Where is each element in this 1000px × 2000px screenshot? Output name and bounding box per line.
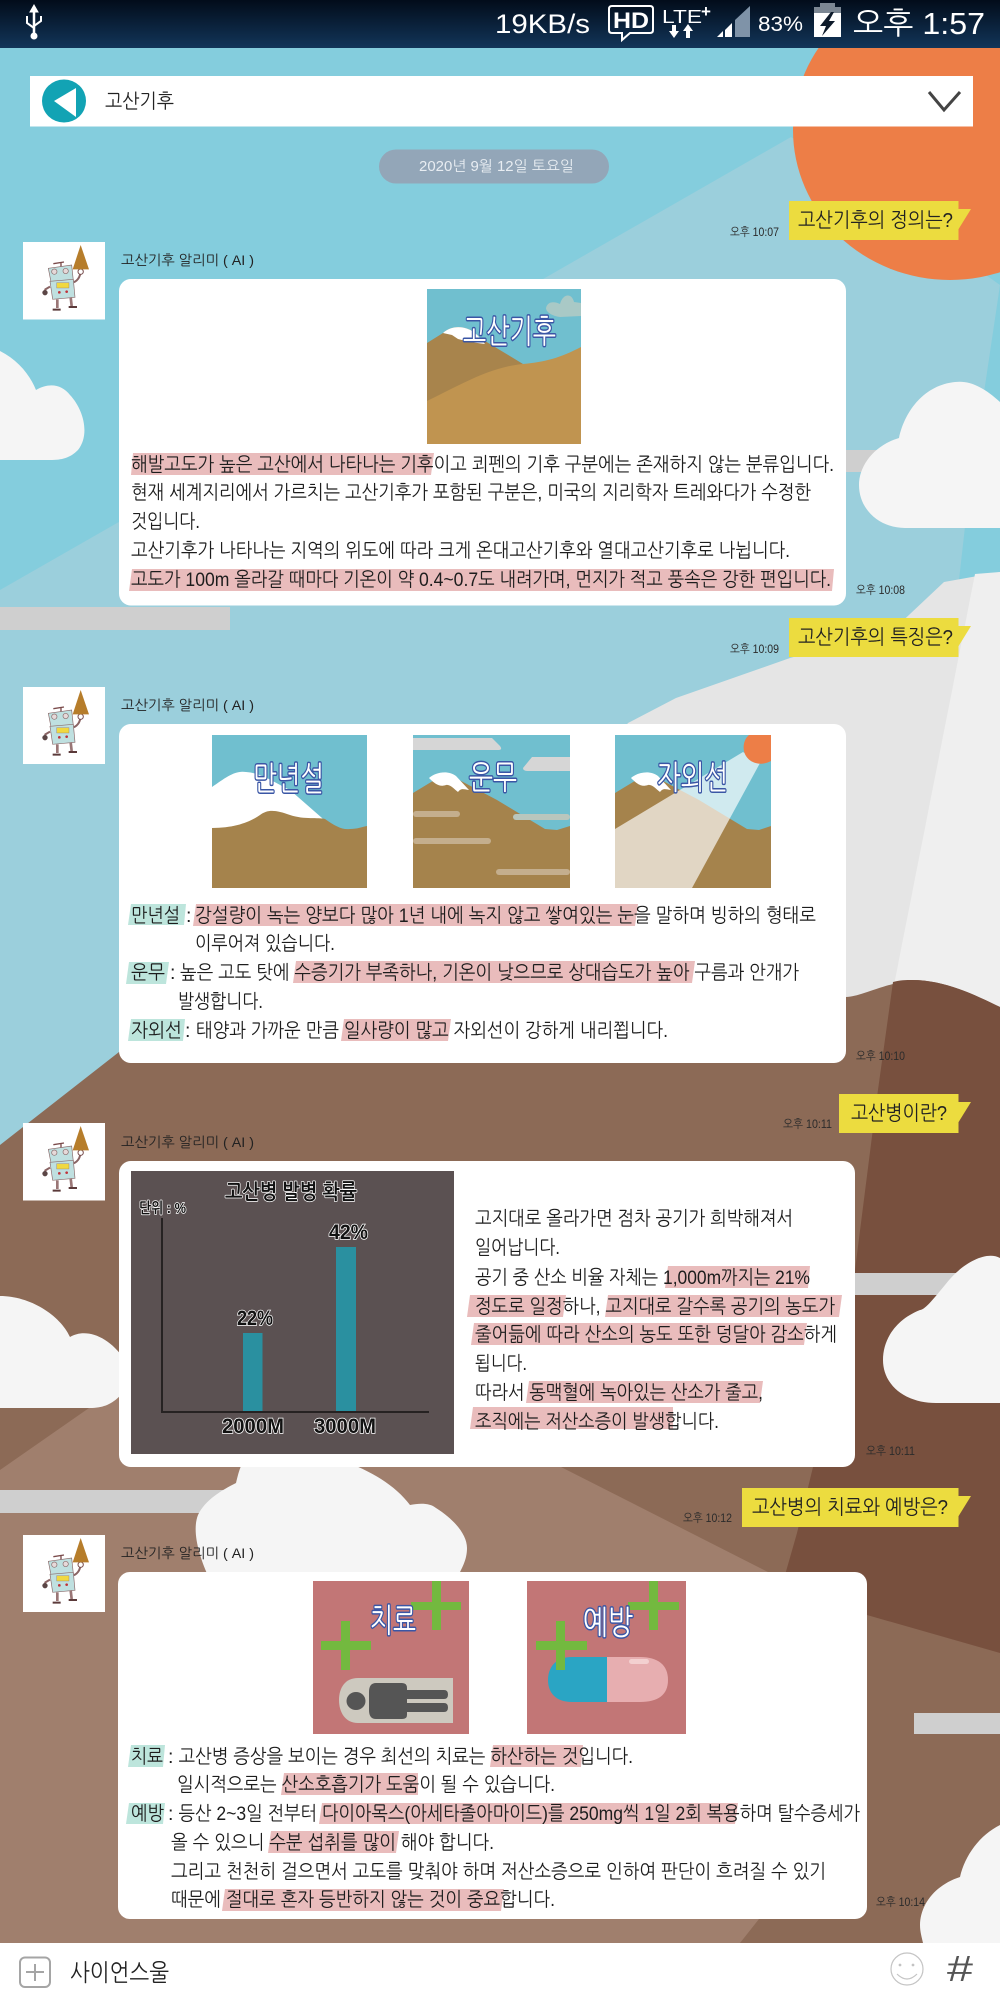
body text: 이루어져 있습니다. [195,933,335,955]
bot name 1: 고산기후 알리미 ( AI ) [121,252,254,268]
body text [131,905,816,1042]
status bar [0,0,1000,48]
background: dark brown facet [785,980,1000,1653]
highlights [467,1266,842,1429]
chart unit: 단위 : % [139,1200,186,1217]
question bubble 3 [839,1094,971,1133]
chart title: 고산병 발병 확률 [225,1181,357,1204]
image: treatment [313,1581,469,1734]
question bubble 3: 고산병이란? [851,1102,947,1125]
icon: HD voice [609,6,653,40]
question bubble 2 [789,618,971,657]
image: cloud and fog [413,735,570,888]
background: grey stripes [0,450,1000,1734]
body text: 치료 [131,1746,163,1768]
header bar [30,76,973,126]
highlights [126,904,695,1041]
image: ultraviolet [615,735,771,888]
body text: 고도가 100m 올라갈 때마다 기온이 약 0.4~0.7도 내려가며, 먼지가 적고 풍속은 강한 편입니다. [131,569,831,591]
body text [475,1208,837,1433]
panel: definition [119,279,846,606]
bar chart [131,1171,454,1454]
time 10:07: 오후 10:07 [730,225,779,239]
question bubble 1 [789,201,971,240]
body text: 것입니다. [131,511,200,533]
room title: 고산기후 [105,91,174,113]
background: pale blue slope [0,137,1000,1170]
panel: treatment and prevention [118,1572,867,1919]
icon: chevron [929,92,960,110]
panel: altitude sickness [119,1161,855,1467]
body text: : [185,1020,190,1042]
date pill: 2020년 9월 12일 토요일 [419,158,574,175]
time 10:08: 오후 10:08 [856,583,905,597]
body text: 조직에는 저산소증이 발생합니다. [475,1411,719,1433]
input text: 사이언스울 [70,1960,169,1987]
chart axes [162,1218,429,1412]
background: left cloud lower [0,1296,125,1408]
body text: : [168,1746,173,1768]
body text: 만년설 [131,905,180,927]
bar 3000M: 3000M [314,1415,376,1438]
bot name 3: 고산기후 알리미 ( AI ) [121,1134,254,1150]
body text: 올 수 있으니 수분 섭취를 많이 해야 합니다. [171,1832,494,1854]
body text: : [170,962,175,984]
icon: signal [717,6,750,37]
avatar 1 [23,242,105,320]
bar 3000M [314,1221,376,1438]
time 10:09: 오후 10:09 [730,642,779,656]
icon: HD voice: HD [613,8,649,33]
body text: 정도로 일정하나, 고지대로 갈수록 공기의 농도가 [475,1296,835,1318]
background: orange sun [793,0,1000,280]
question bubble 4: 고산병의 치료와 예방은? [752,1496,948,1519]
bar 2000M: 22% [237,1307,273,1330]
background: middle cloud [196,1460,467,1580]
question bubble 2: 고산기후의 특징은? [798,626,953,649]
body text [131,1746,860,1911]
background: left cloud upper [0,351,84,460]
body text: 강설량이 녹는 양보다 많아 1년 내에 녹지 않고 쌓여있는 눈을 말하며 빙하의 형태로 [195,905,816,927]
body text: 현재 세계지리에서 가르치는 고산기후가 포함된 구분은, 미국의 지리학자 트레와다가 수정한 [131,482,811,504]
body text [131,454,834,591]
icon: back button [42,80,86,122]
image: highland climate [427,289,581,444]
body text: 발생합니다. [178,991,263,1013]
body text: : [186,905,191,927]
bot name 4: 고산기후 알리미 ( AI ) [121,1545,254,1561]
body text: 고산기후가 나타나는 지역의 위도에 따라 크게 온대고산기후와 열대고산기후로 나뉩니다. [131,540,790,562]
icon: plus button [20,1958,50,1987]
body text: 태양과 가까운 만큼 일사량이 많고 자외선이 강하게 내리쬡니다. [196,1020,668,1042]
body text: 자외선 [131,1020,182,1042]
body text: 운무 [131,962,165,984]
bar 2000M: 2000M [222,1415,284,1438]
body text: 고지대로 올라가면 점차 공기가 희박해져서 [475,1208,793,1230]
image: prevention [527,1581,686,1734]
body text: 등산 2~3일 전부터 다이아목스(아세타졸아마이드)를 250mg씩 1일 2회 복용하며 탈수증세가 [178,1803,860,1825]
image: treatment: 치료 [370,1602,416,1639]
highlights [126,1745,738,1911]
background: grey snow mountain [500,572,1000,1100]
body text: 그리고 천천히 걸으면서 고도를 맞춰야 하며 저산소증으로 인하여 판단이 흐려질 수 있기 [171,1861,826,1883]
background: brown mountain [0,980,1000,1943]
icon: usb [27,5,41,39]
icon: LTE [662,2,711,38]
body text: 줄어듦에 따라 산소의 농도 또한 덩달아 감소하게 [475,1324,837,1346]
image: ultraviolet: 자외선 [657,759,728,796]
bar 3000M: 42% [329,1221,368,1244]
background: bottom right cloud [920,1825,1000,1943]
icon: smiley [891,1953,923,1985]
icon: battery [814,3,841,37]
body text: 때문에 절대로 혼자 등반하지 않는 것이 중요합니다. [171,1889,555,1911]
background: right cloud upper [859,382,1000,528]
body text: : [168,1803,173,1825]
body text: 높은 고도 탓에 수증기가 부족하나, 기온이 낮으므로 상대습도가 높아 구름과 안개가 [180,962,799,984]
image: perennial snow: 만년설 [253,760,324,797]
time 10:11: 오후 10:11 [783,1117,832,1131]
avatar 3 [23,1123,105,1200]
highlights [129,453,834,591]
background: light brown foothill [0,1300,790,1943]
avatar 4 [23,1535,105,1612]
time 10:12: 오후 10:12 [683,1511,732,1525]
network speed: 19KB/s [495,9,590,39]
question bubble 4 [742,1488,971,1527]
image: highland climate: 고산기후 [463,313,556,350]
body text: 일어납니다. [475,1237,560,1259]
body text: 따라서 동맥혈에 녹아있는 산소가 줄고, [475,1382,763,1404]
avatar 2 [23,687,105,764]
time 10:14: 오후 10:14 [876,1895,925,1909]
image: prevention: 예방 [583,1604,633,1641]
date pill [379,150,609,184]
image: perennial snow [212,735,367,888]
icon: hash: # [947,1948,973,1989]
bot name 2: 고산기후 알리미 ( AI ) [121,697,254,713]
panel: characteristics [119,724,846,1063]
time 10:11 reply: 오후 10:11 [866,1444,915,1458]
bar 2000M [222,1307,284,1438]
question bubble 1: 고산기후의 정의는? [798,209,953,232]
icon: LTE: + [701,2,711,21]
body text: 예방 [131,1803,164,1825]
battery percent: 83% [758,13,803,36]
body text: 됩니다. [475,1353,527,1375]
time 10:10: 오후 10:10 [856,1049,905,1063]
input bar [0,1943,1000,2000]
background: light snow facet [893,572,1000,1020]
body text: 일시적으로는 산소호흡기가 도움이 될 수 있습니다. [177,1774,555,1796]
background: right cloud lower [883,1256,1000,1403]
clock: 오후 1:57 [853,6,985,41]
image: cloud and fog: 운무 [469,759,517,796]
body text: 공기 중 산소 비율 자체는 1,000m까지는 21% [475,1267,810,1289]
body text: 고산병 증상을 보이는 경우 최선의 치료는 하산하는 것입니다. [178,1746,633,1768]
body text: 해발고도가 높은 고산에서 나타나는 기후이고 쾨펜의 기후 구분에는 존재하지 않는 분류입니다. [131,454,834,476]
icon: LTE: LTE [662,7,702,27]
